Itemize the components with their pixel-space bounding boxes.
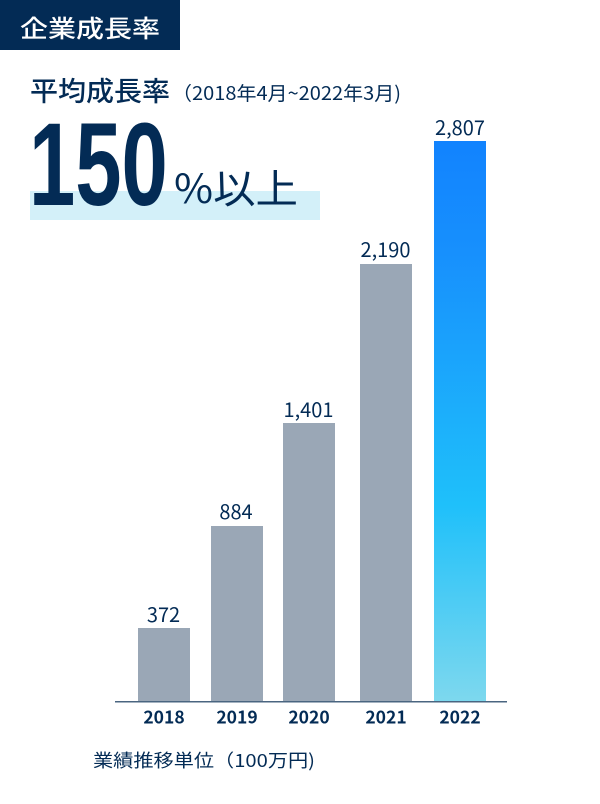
year labels: 2018 bbox=[143, 704, 185, 730]
highlight figure: 150% or more: %以上 bbox=[174, 157, 298, 215]
bar 2019 bbox=[211, 496, 263, 701]
unit note: 業績推移単位（100万円) bbox=[93, 747, 315, 773]
year labels: 2021 bbox=[365, 704, 407, 730]
subheading: average growth rate: 平均成長率 bbox=[30, 70, 170, 109]
bar 2018 bbox=[138, 599, 190, 701]
bar 2020: 1,401 bbox=[284, 394, 333, 423]
bar 2021: 2,190 bbox=[361, 234, 410, 263]
bar 2019: 884 bbox=[219, 496, 253, 525]
bar 2020 bbox=[283, 394, 335, 701]
bar 2022 bbox=[434, 112, 486, 701]
bar chart bbox=[115, 112, 507, 730]
title banner bbox=[0, 0, 180, 50]
year labels: 2022 bbox=[439, 704, 481, 730]
subheading: average growth rate bbox=[30, 70, 401, 109]
highlight figure: 150% or more: 150 bbox=[29, 99, 168, 230]
bar 2018: 372 bbox=[147, 599, 180, 628]
year labels bbox=[143, 704, 481, 730]
year labels: 2019 bbox=[216, 704, 258, 730]
subheading: average growth rate: （2018年4月~2022年3月) bbox=[172, 79, 401, 106]
bar 2021 bbox=[360, 234, 412, 701]
highlight figure: 150% or more bbox=[29, 99, 320, 230]
title banner: 企業成長率 bbox=[20, 9, 160, 44]
year labels: 2020 bbox=[288, 704, 330, 730]
bar 2022: 2,807 bbox=[435, 112, 485, 141]
x axis bbox=[115, 701, 507, 702]
